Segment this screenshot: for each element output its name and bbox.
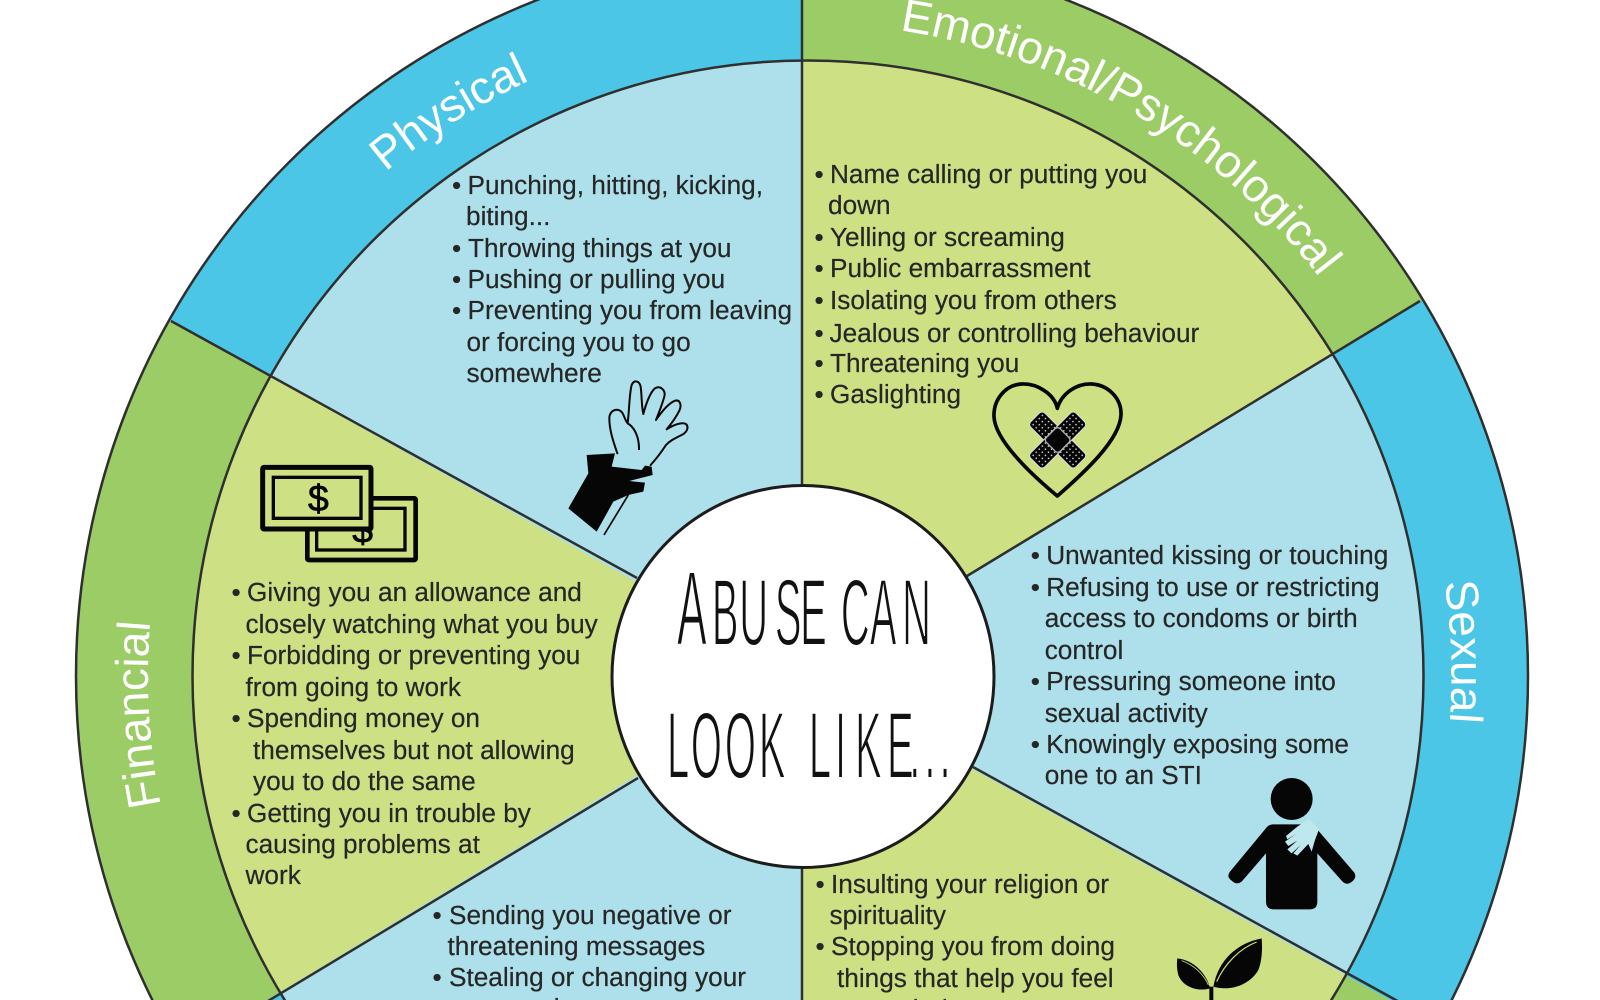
panel text: sexual: sexual activity xyxy=(1045,698,1209,728)
panel text: sexual: • xyxy=(1031,666,1040,696)
panel text: sexual: • xyxy=(1031,572,1040,602)
panel text: emotional/psychological: Isolating you from others xyxy=(830,285,1117,315)
panel text: emotional/psychological: Name calling or putting you xyxy=(830,159,1147,189)
panel text: physical: Throwing things at you xyxy=(468,233,731,263)
icon: person with a hand on the chest xyxy=(1228,778,1355,909)
panel text: financial: themselves but not allowing xyxy=(253,735,575,765)
centre circle with title xyxy=(612,486,994,868)
panel text: financial: • xyxy=(232,703,241,733)
panel text: physical: biting... xyxy=(466,201,550,231)
panel text: financial: • xyxy=(232,577,241,607)
panel text: financial: Getting you in trouble by xyxy=(247,798,532,828)
panel text: physical: somewhere xyxy=(466,358,602,388)
panel text: financial xyxy=(232,577,599,890)
panel text: emotional/psychological: Threatening you xyxy=(830,348,1019,378)
panel text: sexual: • xyxy=(1031,540,1040,570)
panel text: spiritual: Insulting your religion or xyxy=(831,869,1109,899)
title: Abuse can look like xyxy=(667,550,951,799)
title: Abuse can look like: BUSE CAN xyxy=(712,560,931,666)
panel text: sexual: Unwanted kissing or touching xyxy=(1046,540,1388,570)
panel text: physical: Punching, hitting, kicking, xyxy=(468,170,763,200)
panel text: physical: Preventing you from leaving xyxy=(468,295,792,325)
panel text: spiritual: things that help you feel xyxy=(837,963,1114,993)
panel text: spiritual xyxy=(816,869,1115,1000)
panel text: emotional/psychological: • xyxy=(814,222,824,252)
ring label: Sexual: Sexual xyxy=(1446,582,1484,722)
panel text: digital: threatening messages xyxy=(448,931,705,961)
panel text: sexual: one to an STI xyxy=(1045,760,1202,790)
ring label: Physical: Physical xyxy=(368,52,527,170)
panel text: emotional/psychological: • xyxy=(814,379,824,409)
panel text: digital: • xyxy=(432,900,442,930)
title: Abuse can look like: A xyxy=(677,550,707,668)
panel text: financial: work xyxy=(244,860,302,890)
panel text: spiritual: Stopping you from doing xyxy=(831,931,1115,961)
icon: money bills: $ xyxy=(308,477,329,519)
panel text: financial: Giving you an allowance and xyxy=(247,577,582,607)
panel text: sexual: Refusing to use or restricting xyxy=(1046,572,1380,602)
panel text: physical xyxy=(452,170,792,388)
panel text: sexual: Pressuring someone into xyxy=(1046,666,1336,696)
panel text: physical: • xyxy=(452,295,461,325)
panel text: financial: causing problems at xyxy=(246,829,481,859)
icon: sprouting plant xyxy=(1177,938,1262,1000)
title: Abuse can look like: LOOK LIKE... xyxy=(667,693,951,799)
panel text: physical: • xyxy=(452,233,461,263)
panel text: emotional/psychological: Yelling or screaming xyxy=(830,222,1065,252)
icon: hand gripped at the wrist xyxy=(568,381,687,535)
panel text: digital: Stealing or changing your xyxy=(449,962,746,992)
icon: heart with bandage xyxy=(994,384,1121,496)
inner wedge panels xyxy=(194,62,1422,1000)
panel text: sexual: • xyxy=(1031,729,1040,759)
panel text: emotional/psychological: • xyxy=(814,253,824,283)
icon: money bills xyxy=(263,467,416,560)
panel text: emotional/psychological: Jealous or controlling behaviour xyxy=(830,318,1200,348)
panel text: spiritual: spirituality xyxy=(830,900,947,930)
panel text: financial: you to do the same xyxy=(253,766,476,796)
panel text: financial: Forbidding or preventing you xyxy=(247,640,580,670)
panel text: digital: • xyxy=(432,962,442,992)
panel text: spiritual: • xyxy=(816,869,825,899)
panel text: financial: Spending money on xyxy=(247,703,480,733)
panel text: physical: • xyxy=(452,264,461,294)
panel text: financial: closely watching what you buy xyxy=(246,609,599,639)
panel text: physical: Pushing or pulling you xyxy=(468,264,725,294)
panel text: sexual xyxy=(1031,540,1388,790)
panel text: sexual: access to condoms or birth xyxy=(1045,603,1358,633)
panel text: spiritual: • xyxy=(816,931,825,961)
panel text: emotional/psychological: • xyxy=(814,159,824,189)
panel text: digital: Sending you negative or xyxy=(449,900,732,930)
panel text: emotional/psychological: • xyxy=(814,285,824,315)
panel text: physical: or forcing you to go xyxy=(466,327,691,357)
panel text: financial: from going to work xyxy=(246,672,462,702)
panel text: emotional/psychological: down xyxy=(828,190,891,220)
panel text: emotional/psychological: • xyxy=(814,318,824,348)
panel text: digital xyxy=(432,900,746,1000)
panel text: emotional/psychological xyxy=(814,159,1200,409)
panel text: emotional/psychological: Public embarrassment xyxy=(830,253,1091,283)
panel text: sexual: Knowingly exposing some xyxy=(1046,729,1349,759)
ring label: Financial: Financial xyxy=(114,622,160,808)
panel text: emotional/psychological: Gaslighting xyxy=(830,379,961,409)
icon: money bills: $ xyxy=(352,508,373,550)
panel text: financial: • xyxy=(232,640,241,670)
panel text: sexual: control xyxy=(1045,635,1123,665)
panel text: physical: • xyxy=(452,170,461,200)
panel text: financial: • xyxy=(232,798,241,828)
panel text: emotional/psychological: • xyxy=(814,348,824,378)
